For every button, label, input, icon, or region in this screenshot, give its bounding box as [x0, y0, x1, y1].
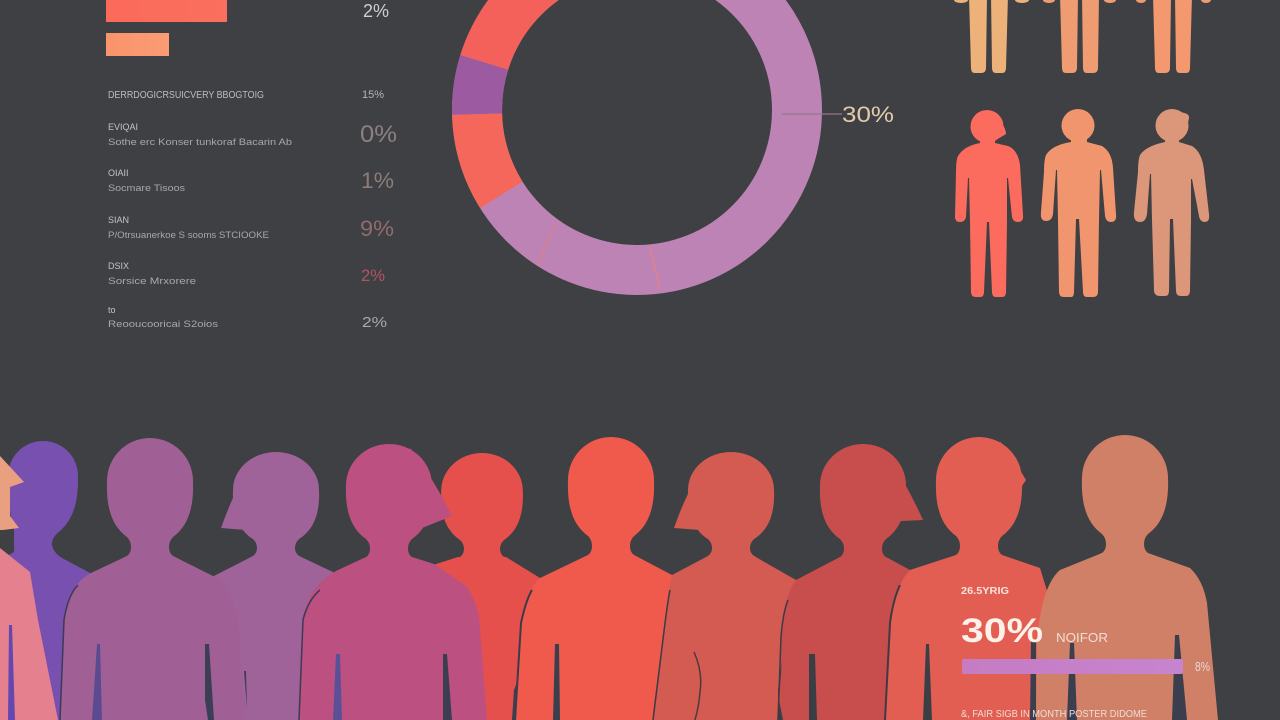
arm gaps	[1067, 643, 1077, 720]
outline	[515, 590, 532, 720]
person 4: magenta	[299, 444, 487, 720]
panel: left statistics list	[106, 0, 397, 331]
arm gap	[694, 652, 701, 720]
donut value: 30%	[842, 102, 894, 127]
pictogram: top row legs	[954, 0, 1211, 73]
outline	[778, 600, 788, 720]
outline	[653, 590, 670, 720]
arm gaps	[333, 654, 342, 720]
figure: orange person	[1041, 109, 1116, 297]
person 2: mauve	[60, 438, 247, 720]
leader line	[782, 113, 842, 115]
legs 3	[1136, 0, 1211, 73]
person 8: deep red	[778, 444, 925, 720]
row 2: Socmare Tisoos	[108, 183, 186, 193]
number suffix: NOIFOR	[1056, 630, 1108, 645]
crowd of silhouettes	[0, 435, 1218, 720]
person 11: front pink	[0, 456, 58, 720]
person 1: purple	[0, 441, 130, 720]
segment: lower red	[477, 114, 501, 195]
value: bar percent: 2%	[363, 1, 389, 21]
small label: 26.5YRIG	[961, 586, 1009, 597]
row 1: 0%	[360, 121, 397, 148]
row 1	[108, 121, 397, 148]
person 10: terracotta	[1036, 435, 1218, 720]
row 4: DSIX	[108, 261, 129, 271]
segment divider 2	[650, 247, 660, 290]
row 5	[108, 305, 387, 331]
row 2: OIAII	[108, 168, 129, 178]
row 4: 2%	[361, 266, 385, 285]
chart: donut	[477, 0, 894, 290]
row 5: 2%	[362, 314, 387, 331]
bar: top red	[106, 0, 227, 22]
bar value: 8%	[1195, 659, 1210, 674]
outline	[299, 590, 320, 720]
person 7: muted red with bob	[653, 452, 810, 720]
segment: large mauve	[477, 0, 797, 270]
row 2	[108, 168, 394, 193]
arm gap	[553, 644, 560, 720]
legs 1	[954, 0, 1029, 73]
segment: top red	[484, 0, 557, 62]
figure: tan person	[1134, 109, 1209, 296]
row 3: 9%	[360, 216, 394, 241]
arm gap	[809, 654, 817, 720]
arm gap	[923, 644, 932, 720]
row 4: Sorsice Mrxorere	[108, 276, 196, 286]
head	[0, 456, 24, 530]
arm gap	[8, 625, 15, 720]
person 5: red	[430, 453, 550, 720]
person 9: coral red	[885, 437, 1060, 720]
row 3: SIAN	[108, 215, 129, 225]
row 2: 1%	[361, 168, 394, 193]
row 4	[108, 261, 385, 286]
row 3: P/Otrsuanerkoe S sooms STCIOOKE	[108, 230, 269, 240]
row 5: to	[108, 305, 116, 315]
arm gaps	[92, 644, 102, 720]
segment divider 1	[537, 223, 557, 265]
callout: 30% stat	[961, 586, 1210, 720]
legs 2	[1043, 0, 1116, 73]
tie gap	[1030, 640, 1036, 720]
pictogram: bottom row figures	[955, 109, 1209, 297]
list heading: DERRDOGICRSUICVERY BBOGTOIG	[108, 90, 264, 101]
row 1: Sothe erc Konser tunkoraf Bacarin Ab	[108, 137, 292, 147]
value: heading percent: 15%	[362, 89, 384, 101]
big number: 30%	[961, 612, 1043, 650]
segment: purple	[477, 62, 484, 114]
row 1: EVIQAI	[108, 122, 138, 132]
outline	[885, 585, 900, 720]
bar: second orange	[106, 33, 169, 56]
side gap	[778, 660, 783, 720]
row 5: Reooucooricai S2oios	[108, 319, 219, 329]
person 3: mauve with bob	[200, 452, 360, 720]
gap	[3, 532, 15, 548]
footnote: &, FAIR SIGB IN MONTH POSTER DIDOME	[961, 709, 1147, 720]
figure: red person	[955, 110, 1023, 297]
outline	[60, 585, 78, 720]
body	[0, 548, 58, 720]
person 6: bright red	[512, 437, 710, 720]
row 3	[108, 215, 394, 241]
progress bar	[962, 659, 1183, 674]
